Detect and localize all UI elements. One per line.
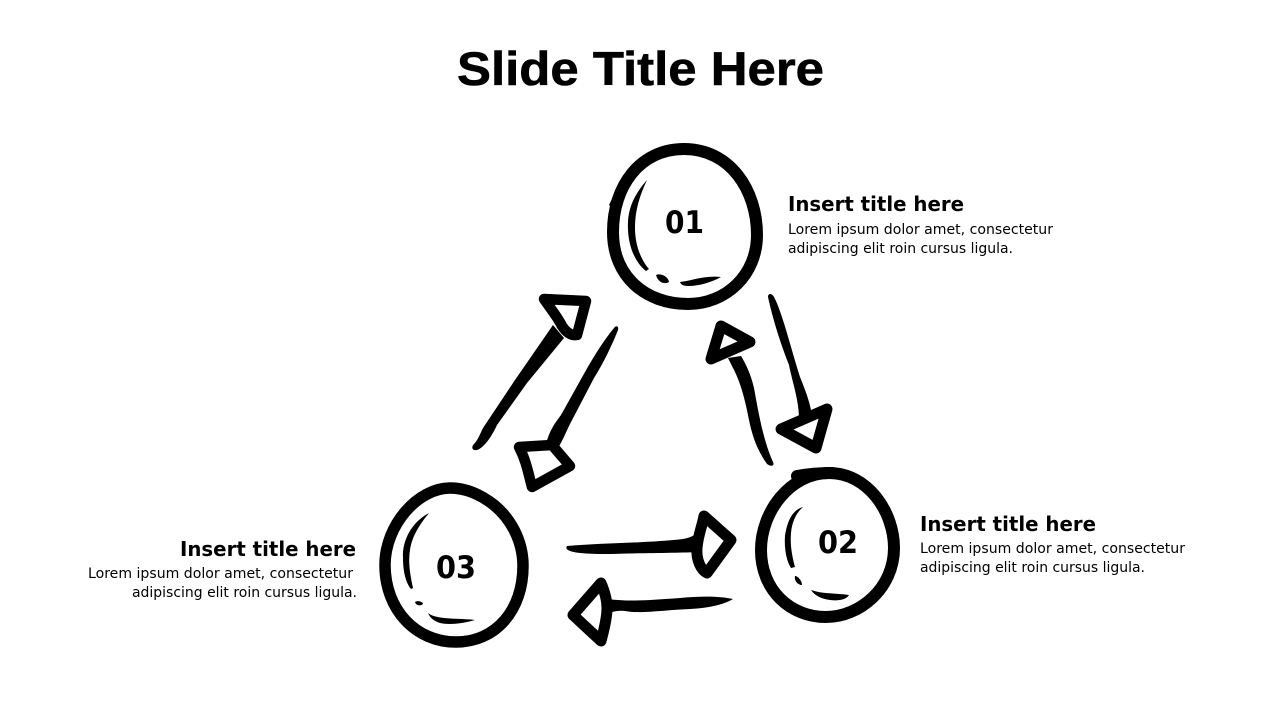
text block 02 [920, 512, 1185, 576]
text block 03 [88, 537, 357, 601]
arrow: 03 to 01 [472, 299, 586, 450]
heading 02: Insert title here [920, 512, 1096, 536]
body 02: adipiscing elit roin cursus ligula. [920, 560, 1145, 576]
number 03: 03 [436, 550, 476, 586]
body 03: adipiscing elit roin cursus ligula. [132, 585, 357, 601]
title: Slide Title Here [457, 42, 824, 95]
body 01: Lorem ipsum dolor amet, consectetur [788, 222, 1053, 238]
heading 01: Insert title here [788, 192, 964, 216]
body 02 [920, 541, 1185, 576]
body 02: Lorem ipsum dolor amet, consectetur [920, 541, 1185, 557]
arrow: 02 to 03 [573, 583, 733, 641]
arrow: 01 to 02 [768, 294, 827, 448]
circle 03 [385, 488, 523, 642]
body 01 [788, 222, 1053, 257]
arrow: 02 to 01 [711, 326, 774, 466]
body 03 [88, 566, 357, 601]
number 02: 02 [818, 525, 858, 561]
text block 01 [788, 192, 1053, 257]
number 01: 01 [665, 205, 704, 241]
circle 02 [761, 473, 894, 617]
body 03: Lorem ipsum dolor amet, consectetur [88, 566, 353, 582]
circle 01 [609, 149, 757, 304]
heading 03: Insert title here [180, 537, 356, 561]
arrow: 01 to 03 [519, 326, 618, 487]
body 01: adipiscing elit roin cursus ligula. [788, 241, 1013, 257]
arrow: 03 to 02 [566, 516, 731, 573]
